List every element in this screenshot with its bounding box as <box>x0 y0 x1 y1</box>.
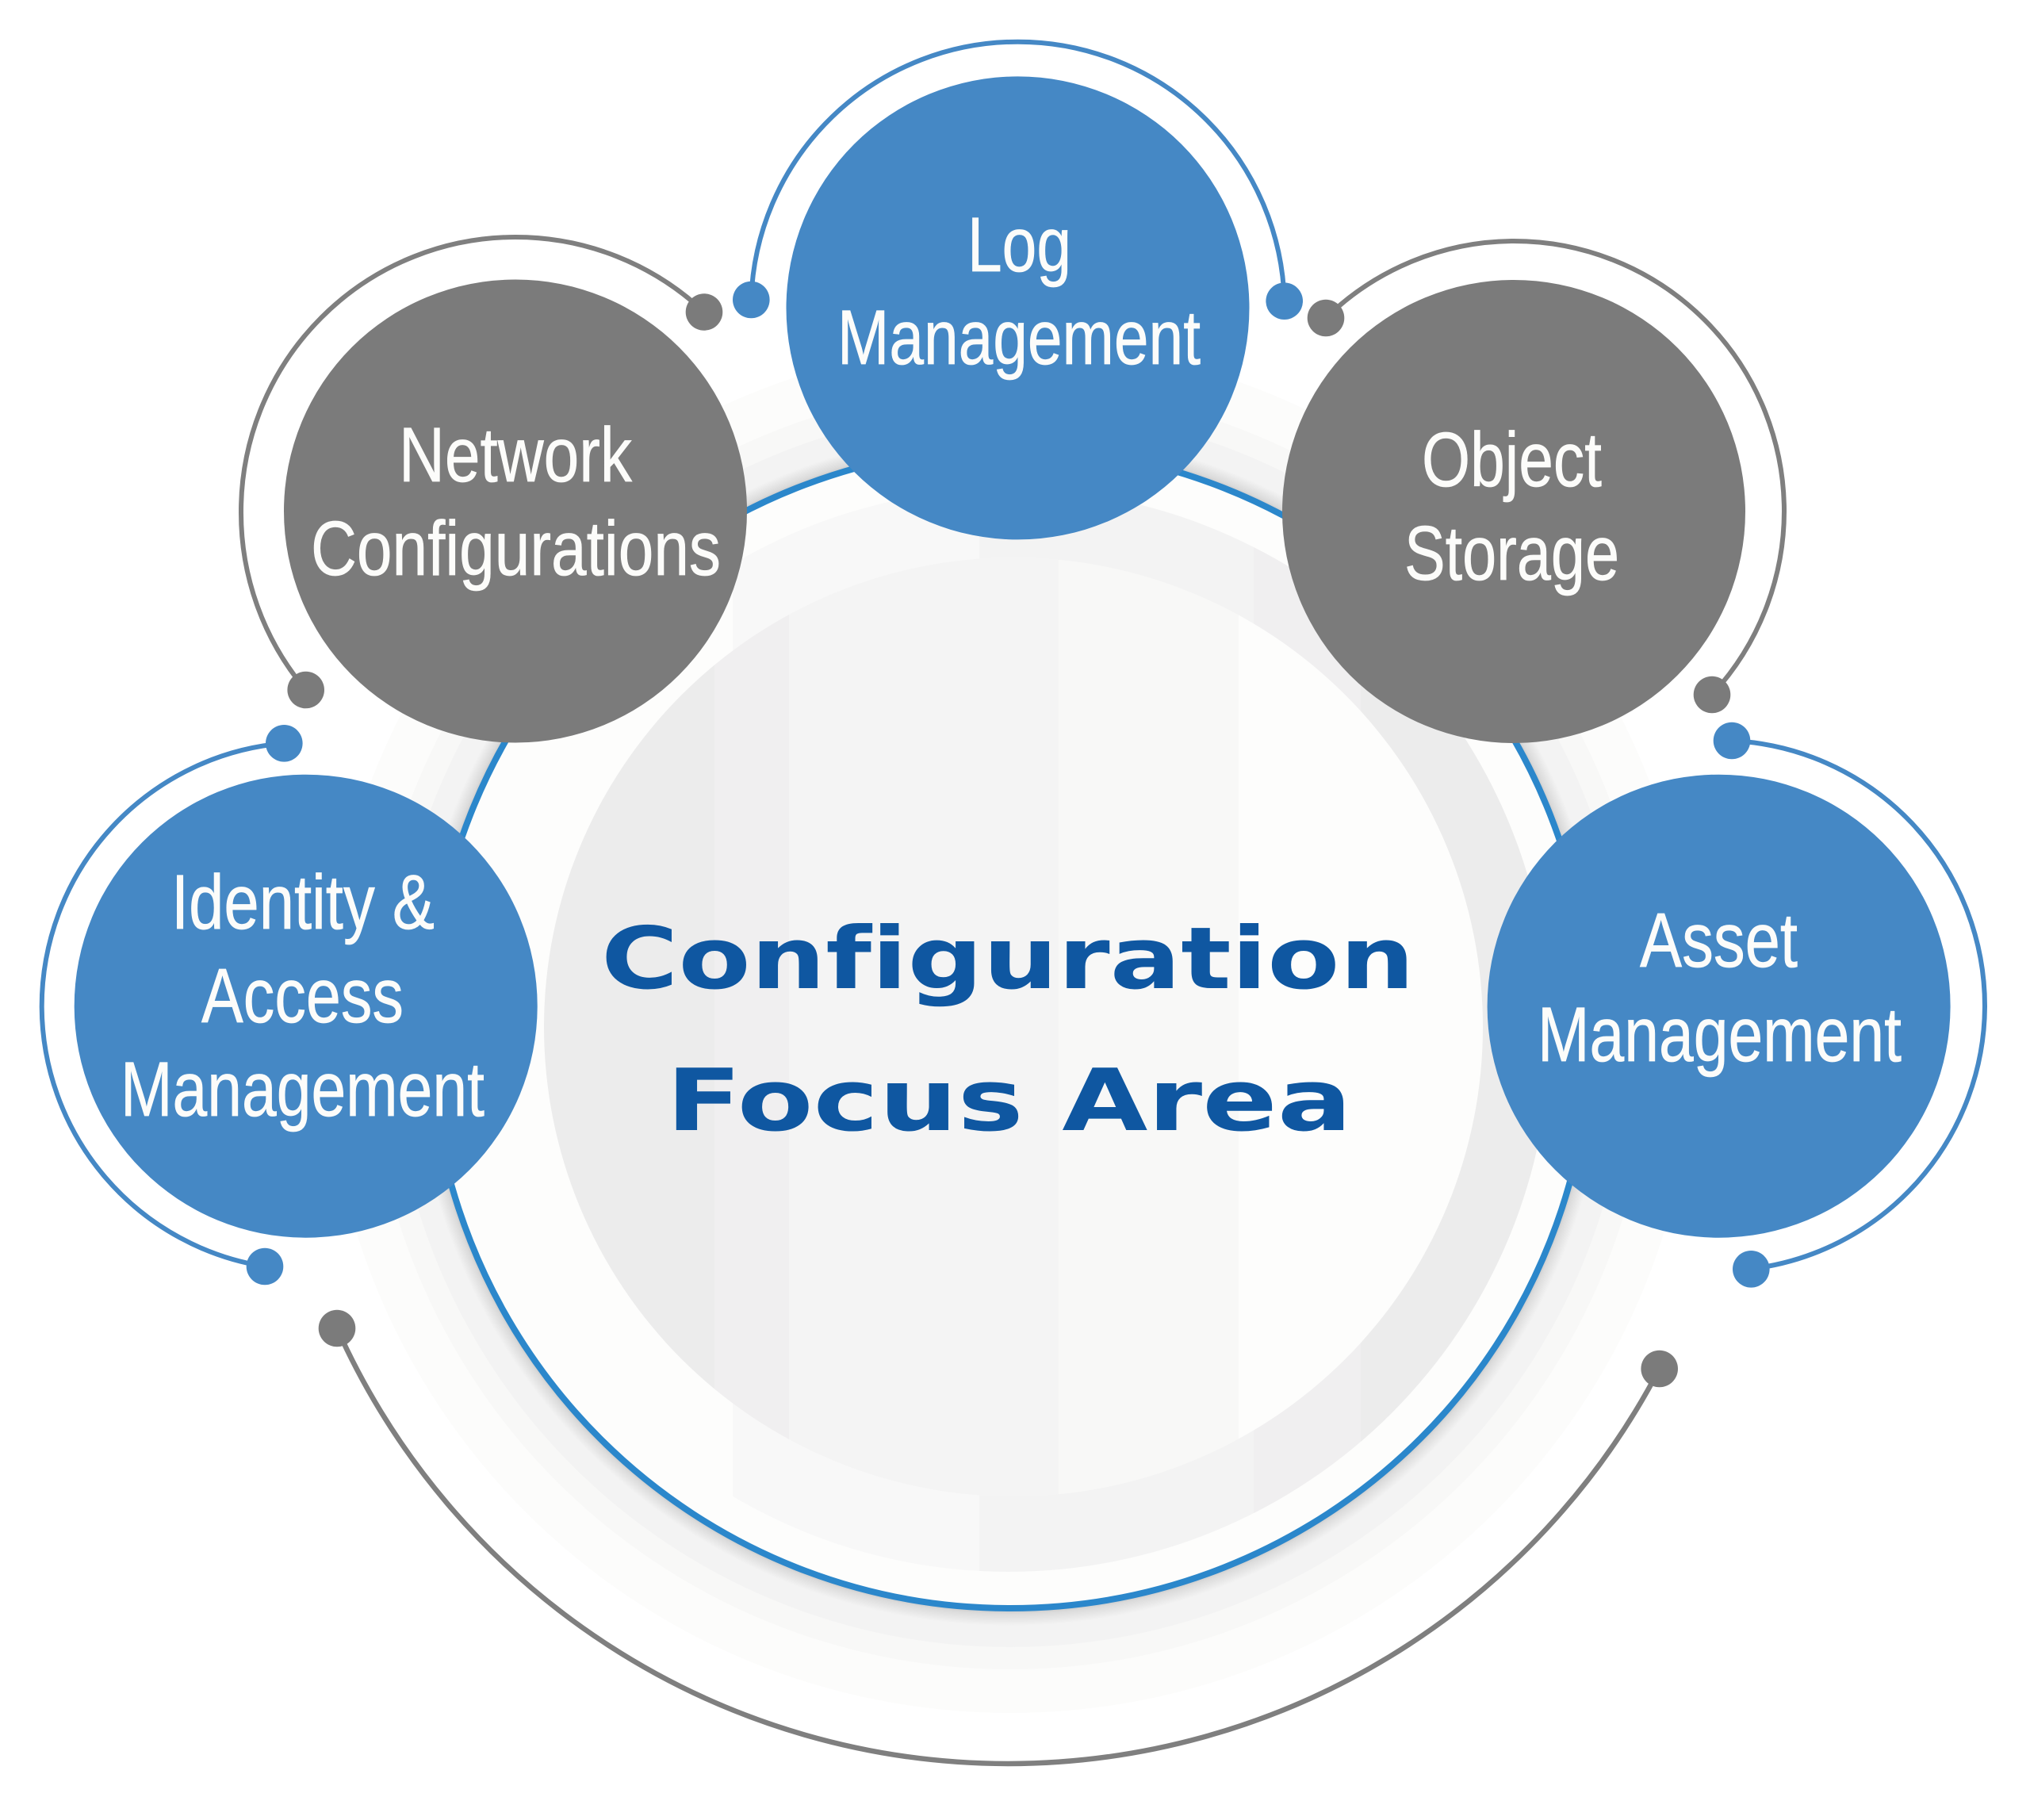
node: Log Management <box>733 42 1303 539</box>
central disc with blue ring <box>430 447 1591 1608</box>
node: Log Management: Management <box>837 294 1201 381</box>
outer grey arc with end dots <box>319 1310 1678 1764</box>
node: Object Storage: Storage <box>1404 510 1619 596</box>
node: Identity and Access Management: Identity & <box>171 859 435 945</box>
center title <box>601 910 1415 1151</box>
background halo rings <box>325 343 1695 1713</box>
node: Identity and Access Management <box>42 725 538 1285</box>
node: Asset Management <box>1488 722 1985 1288</box>
node: Asset Management: Asset <box>1640 897 1798 983</box>
node: Network Configurations: Configurations <box>311 505 721 592</box>
node: Identity and Access Management: Access <box>201 952 404 1039</box>
node: Identity and Access Management: Management <box>121 1046 485 1132</box>
center title: Focus Area <box>666 1052 1352 1151</box>
node: Object Storage: Object <box>1422 416 1602 503</box>
node: Object Storage <box>1282 241 1784 743</box>
node: Asset Management: Management <box>1538 991 1902 1078</box>
node: Network Configurations: Network <box>399 412 632 498</box>
node: Log Management: Log <box>967 201 1071 288</box>
node: Network Configurations <box>241 237 747 743</box>
center title: Configuration <box>601 910 1415 1009</box>
